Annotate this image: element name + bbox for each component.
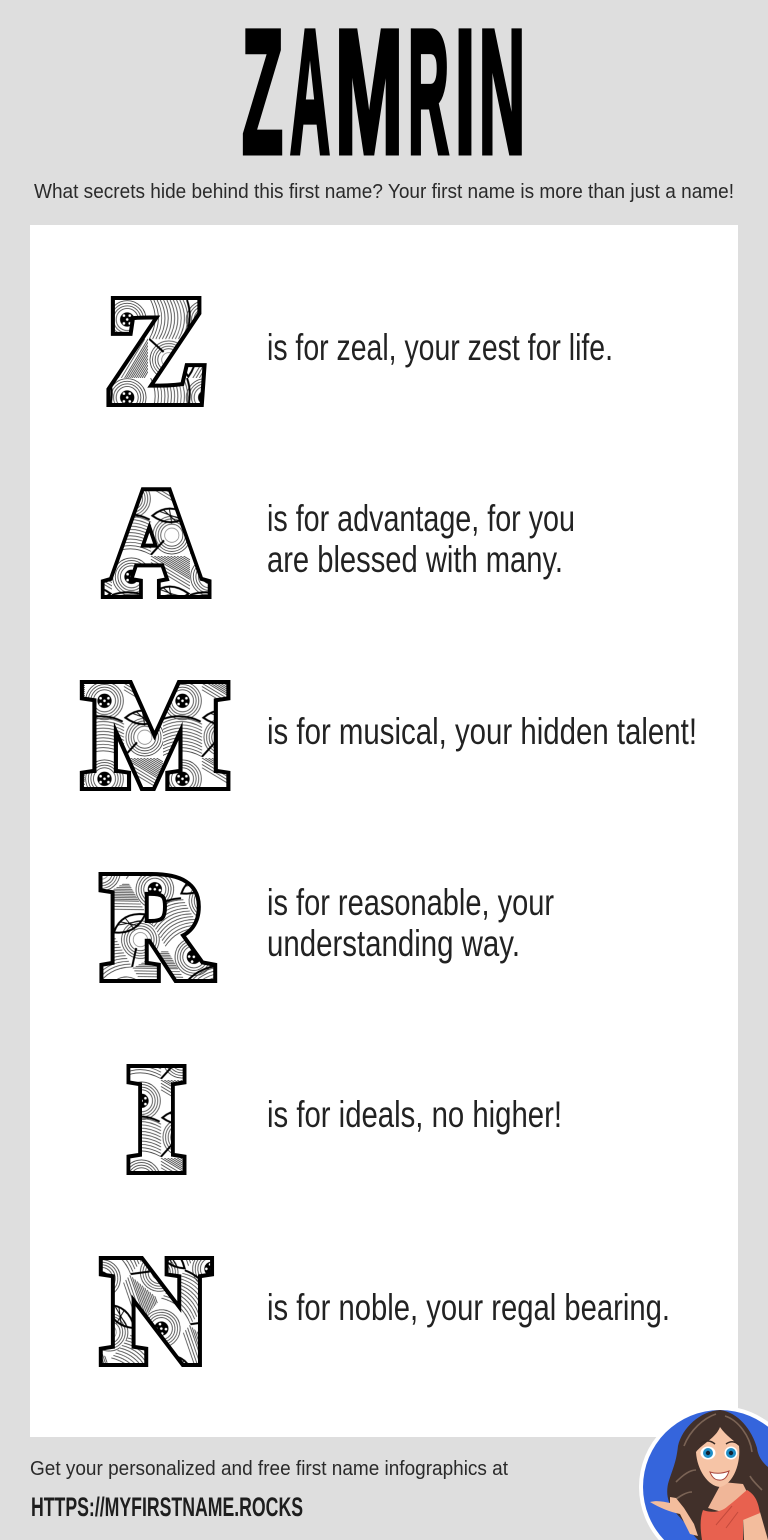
title: M <box>335 0 403 190</box>
title: R <box>408 0 449 190</box>
text: R meaning: understanding way. <box>267 923 520 964</box>
text: A meaning: is for advantage, for you <box>267 498 575 539</box>
icon: decorated letter R: R <box>104 847 209 1007</box>
icon: avatar of a woman <box>639 1406 768 1540</box>
icon: decorated letter M: M <box>86 655 226 815</box>
title: Z <box>242 0 283 190</box>
text: N meaning: is for noble, your regal bearing. <box>267 1287 670 1328</box>
row: letter M <box>86 655 697 815</box>
row: letter N <box>104 1231 670 1391</box>
icon: decorated letter A: A <box>107 463 205 623</box>
footer prompt: Get your personalized and free first name infographics at <box>30 1458 508 1480</box>
row: letter R <box>104 847 554 1007</box>
footer url: HTTPS://MYFIRSTNAME.ROCKS <box>31 1492 303 1522</box>
icon: decorated letter I: I <box>130 1039 184 1199</box>
icon: decorated letter A: A <box>107 463 205 623</box>
row: letter I <box>130 1039 562 1199</box>
text: R meaning <box>267 882 554 964</box>
text: A meaning <box>267 498 575 580</box>
icon: decorated letter Z: Z <box>108 271 206 431</box>
icon: decorated letter M: M <box>86 655 226 815</box>
row: letter A <box>107 463 575 623</box>
text: N <box>479 0 525 190</box>
subtitle: What secrets hide behind this first name? Your first name is more than just a name! <box>34 181 734 203</box>
text: Z meaning: is for zeal, your zest for life. <box>267 327 613 368</box>
icon: decorated letter Z: Z <box>108 271 206 431</box>
icon: decorated letter N: N <box>104 1231 208 1391</box>
text: R meaning: is for reasonable, your <box>267 882 554 923</box>
title: I <box>455 0 475 190</box>
icon: decorated letter N: N <box>104 1231 208 1391</box>
text: A meaning: are blessed with many. <box>267 539 563 580</box>
row: letter Z <box>108 271 613 431</box>
text: I meaning: is for ideals, no higher! <box>267 1094 562 1135</box>
panel: name letters <box>30 225 738 1437</box>
title: A <box>290 0 330 190</box>
icon: decorated letter R: R <box>104 847 209 1007</box>
icon: decorated letter I: I <box>130 1039 184 1199</box>
